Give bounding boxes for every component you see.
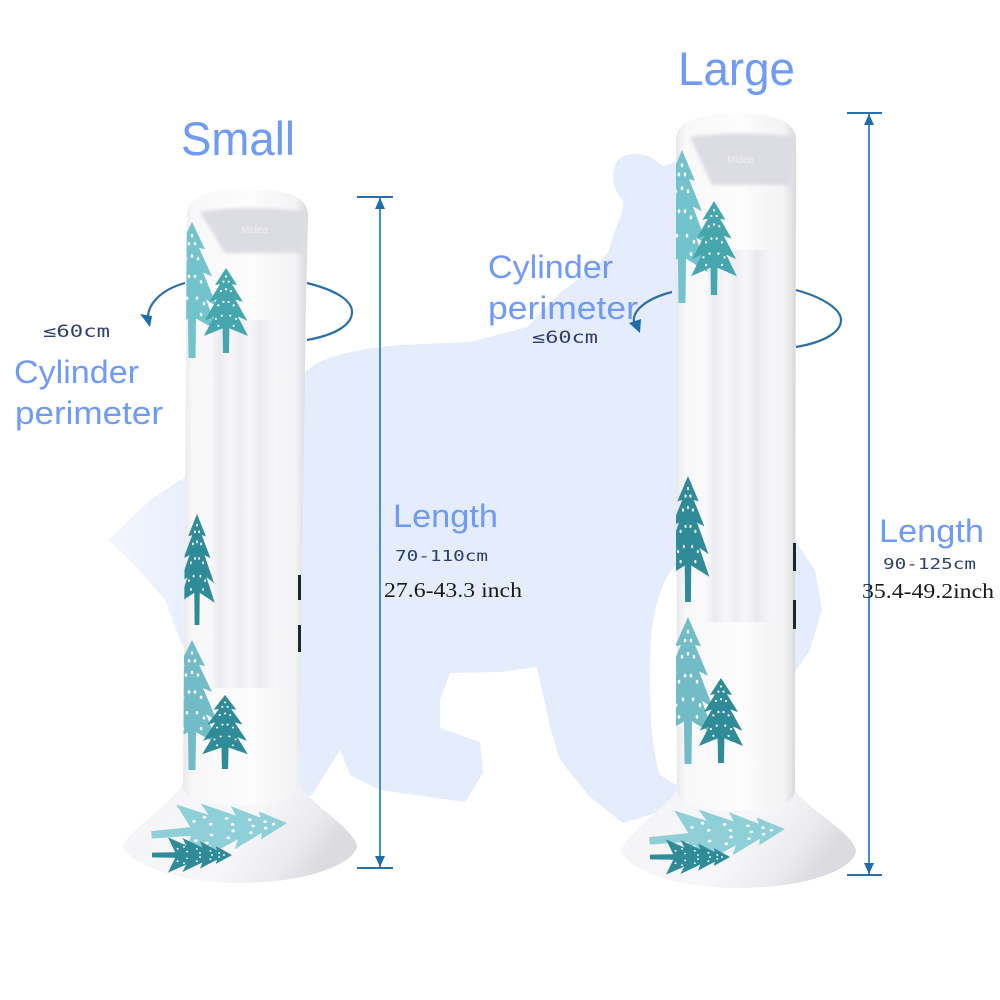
text: small length: 70-110cm — [395, 547, 488, 565]
text: large perimeter size: ≤60cm — [532, 328, 598, 348]
text: small length: 27.6-43.3 inch — [384, 578, 523, 602]
fan base — [621, 790, 856, 888]
rotation arrow: large fan — [629, 290, 841, 347]
control slots — [793, 543, 796, 629]
grill stripes — [210, 320, 276, 688]
dimension arrow: small length — [357, 197, 393, 868]
text: small cylinder perimeter: perimeter — [15, 395, 163, 431]
fan column — [183, 189, 308, 805]
rotation arrow: small fan — [140, 283, 352, 340]
dimension arrow: large length — [847, 113, 882, 875]
tree pattern — [183, 222, 248, 770]
fan top cap — [200, 208, 306, 253]
text: large length: Length — [879, 513, 984, 549]
text: small length: Length — [393, 498, 498, 534]
text: small length — [384, 498, 523, 602]
text: large cylinder perimeter: Cylinder — [488, 249, 613, 285]
background bear silhouette — [108, 154, 822, 823]
text: large length: 90-125cm — [883, 555, 976, 573]
text: large cylinder perimeter — [488, 249, 638, 326]
fan logo: Midea — [727, 155, 755, 166]
fan logo: Midea — [241, 225, 269, 236]
text: large cylinder perimeter: perimeter — [488, 290, 638, 326]
grill stripes — [705, 250, 773, 622]
text: small cylinder perimeter: Cylinder — [14, 354, 139, 390]
small tower fan — [123, 189, 357, 883]
fan top cap — [690, 134, 795, 185]
large tower fan — [621, 113, 856, 888]
text: large length — [862, 513, 995, 603]
fan base — [123, 783, 357, 883]
text: small perimeter size: ≤60cm — [43, 322, 110, 342]
text: small cylinder perimeter — [14, 354, 163, 431]
fan column — [676, 113, 796, 811]
tree pattern — [676, 150, 743, 764]
title: Large: Large — [678, 42, 795, 95]
text: large length: 35.4-49.2inch — [862, 579, 995, 603]
title: Small: Small — [181, 112, 295, 165]
control slots — [298, 575, 301, 652]
